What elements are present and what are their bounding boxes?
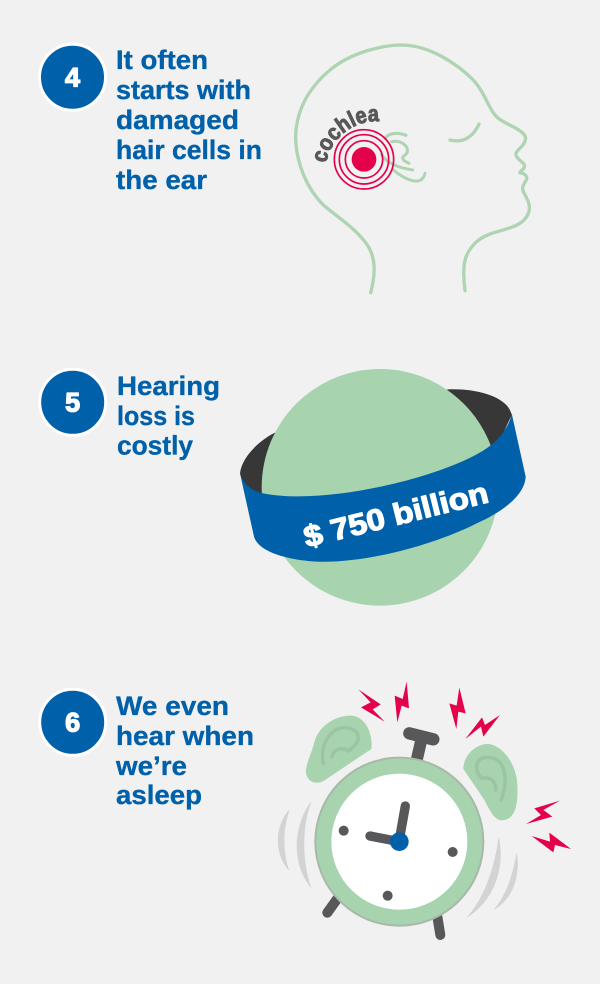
heading 6: We even hear when we're asleep: We even (116, 691, 229, 721)
ear lines (382, 133, 425, 181)
cochlea target rings (334, 130, 394, 189)
clock centre (390, 832, 409, 851)
left ear (306, 716, 372, 783)
heading 4: It often starts with damaged hair cells in the ear: hair cells in (116, 135, 262, 165)
heading 4: It often starts with damaged hair cells in the ear: It often (116, 45, 208, 75)
illustration: globe with cost band (240, 369, 526, 606)
band inner back side (240, 389, 512, 507)
number badge 4: 4 (65, 63, 80, 93)
heading 6: We even hear when we're asleep: hear when (116, 721, 254, 751)
heading 5: Hearing loss is costly: loss is (117, 401, 195, 431)
heading 4: It often starts with damaged hair cells in the ear: starts with (116, 75, 251, 105)
heading 5: Hearing loss is costly: Hearing (117, 371, 220, 401)
heading 4: It often starts with damaged hair cells in the ear: the ear (116, 165, 207, 195)
hour markers (339, 826, 458, 901)
sound bolts (358, 682, 571, 852)
clock feet (327, 895, 440, 935)
illustration: head profile with cochlea (294, 43, 532, 294)
illustration: ringing alarm clock with ears (278, 682, 571, 935)
heading 4: It often starts with damaged hair cells in the ear (116, 45, 262, 195)
head outline (296, 45, 529, 293)
number badge 5 (40, 369, 106, 435)
closed eye (450, 124, 479, 141)
band front (240, 413, 526, 562)
heading 5: Hearing loss is costly (117, 371, 220, 460)
clock hands (370, 806, 405, 842)
globe (262, 369, 498, 606)
heading 6: We even hear when we're asleep: we’re (115, 751, 187, 781)
heading 6: We even hear when we're asleep: asleep (116, 780, 202, 810)
clock face (331, 774, 467, 910)
motion lines (278, 801, 518, 918)
number badge 6 (40, 689, 106, 755)
heading 6: We even hear when we're asleep (115, 691, 254, 810)
band label: $ 750 billion: $ 750 billion (300, 477, 492, 554)
heading 4: It often starts with damaged hair cells in the ear: damaged (116, 105, 239, 135)
cochlea label: cochlea (314, 108, 380, 162)
number badge 6: 6 (65, 708, 80, 738)
right ear (463, 744, 517, 820)
number badge 5: 5 (65, 388, 80, 418)
heading 5: Hearing loss is costly: costly (117, 430, 193, 460)
clock body (315, 758, 483, 926)
number badge 4 (40, 44, 106, 110)
clock hammer (409, 733, 433, 763)
